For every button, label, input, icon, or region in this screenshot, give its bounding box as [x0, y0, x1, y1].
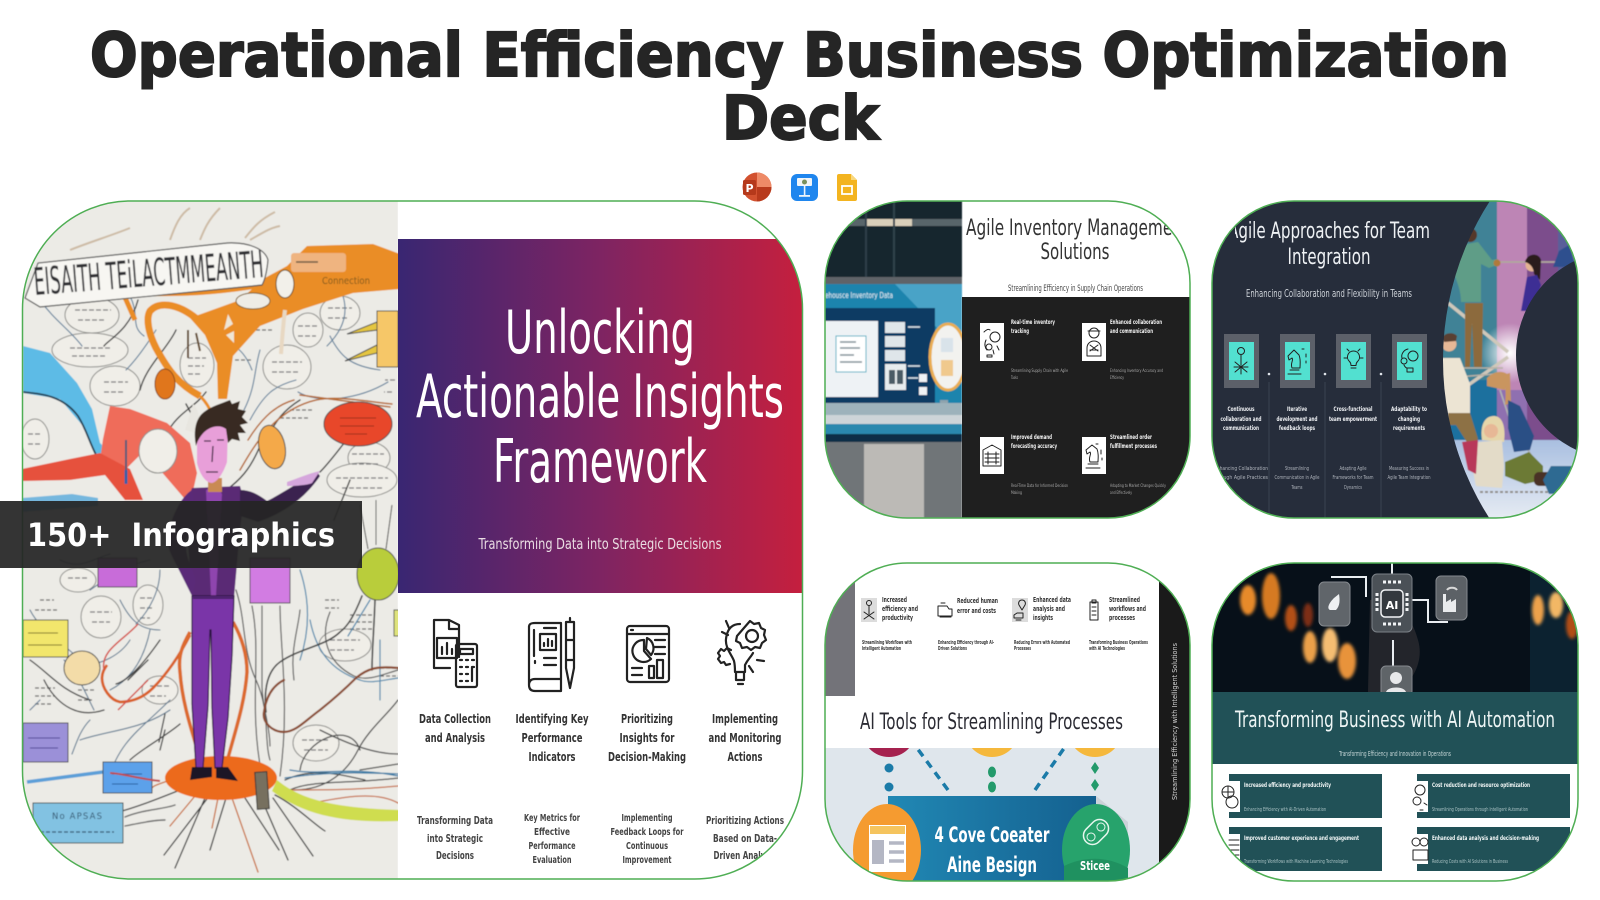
feature headings: Data Collection: [419, 711, 491, 726]
feature headings: Identifying Key: [516, 711, 588, 726]
woman in purple: [1521, 255, 1541, 311]
faint sketches: [70, 208, 280, 250]
feature: order fulfillment: Streamlined order: [1110, 434, 1152, 441]
feature descriptions: Implementing: [622, 813, 672, 824]
step: continuous collaboration: collaboration and: [1220, 416, 1262, 423]
red branch: [100, 406, 197, 505]
illustration: mind map with standing figure: [21, 201, 402, 879]
step: cross-functional teams: Frameworks for Team: [1332, 475, 1374, 481]
flow graphic: [825, 703, 1159, 896]
panel: main slide preview: [21, 201, 803, 879]
AI chip: AI: [1386, 599, 1398, 612]
panel: AI Tools for Streamlining Processes: [825, 563, 1190, 896]
icon: dashboard chart: [627, 626, 669, 682]
step: iterative development: Teams: [1291, 485, 1303, 491]
icon: report and pen: [529, 618, 574, 691]
hero title panel: Transforming Data into Strategic Decisions: [478, 535, 722, 553]
hero title panel: Unlocking: [505, 298, 695, 368]
hero title panel: Framework: [493, 427, 707, 497]
icon: Google Slides: [837, 174, 857, 201]
feature headings: Implementing: [712, 711, 778, 726]
feature descriptions: Improvement: [622, 855, 672, 866]
benefit: reduced error: [938, 596, 998, 652]
feature: order fulfillment: fulfillment processes: [1110, 443, 1157, 450]
coloured notes: No APSAS: [52, 812, 102, 822]
warehouse monitor photo: [825, 201, 966, 518]
heading: [966, 218, 1172, 260]
step: iterative development: [1274, 334, 1320, 491]
benefit: efficiency: productivity: [882, 613, 913, 622]
badge: 150+ Infographics: [0, 501, 362, 568]
feature: order fulfillment: Adapting to Market Changes Quickly: [1110, 483, 1166, 489]
benefit: workflows: [1089, 595, 1148, 652]
benefit: workflows: Transforming Business Operations: [1089, 640, 1148, 646]
title: Operational Efficiency Business Optimization: [90, 20, 1509, 91]
step: cross-functional teams: Cross-functional: [1334, 406, 1372, 413]
benefit: efficiency: [861, 595, 918, 652]
card: efficiency: Increased efficiency and productivity: [1244, 782, 1331, 789]
raised arms: [1487, 372, 1507, 390]
card: efficiency: Enhancing Efficiency with AI-Driven Automation: [1244, 807, 1326, 813]
step: continuous collaboration: Continuous: [1228, 406, 1255, 413]
benefit: reduced error: Enhancing Efficiency through AI-: [938, 640, 994, 646]
red lower branches: [102, 622, 247, 758]
card: data analysis: [1412, 827, 1570, 871]
step: iterative development: Iterative: [1287, 406, 1307, 413]
hero title panel: Actionable Insights: [416, 362, 784, 432]
benefit: data analysis: insights: [1033, 613, 1053, 622]
flow graphic: Sticee: [1080, 859, 1110, 873]
feature: order fulfillment: and Effectively: [1110, 490, 1132, 496]
feature: real-time tracking: tracking: [1011, 328, 1029, 335]
thin branches: [30, 296, 398, 872]
feature descriptions: Prioritizing Actions: [706, 815, 784, 827]
flow graphic: 4 Cove Coeater: [934, 823, 1050, 847]
feature: collaboration: Enhanced collaboration: [1110, 319, 1162, 326]
panel: Agile Approaches for Team Integration: Integration: [1288, 245, 1370, 270]
step: iterative development: feedback loops: [1279, 425, 1315, 432]
feature descriptions: Based on Data-: [713, 833, 777, 845]
dark feature panel: [962, 297, 1190, 518]
benefit: reduced error: error and costs: [957, 606, 996, 615]
feature headings: Decision-Making: [608, 749, 686, 764]
AI chip photo: [1212, 563, 1578, 696]
hero title panel: [398, 239, 803, 593]
feature: real-time tracking: Tasks: [1010, 375, 1018, 381]
step: cross-functional teams: Dynamics: [1344, 485, 1362, 491]
step: continuous collaboration: through Agile Practices: [1214, 475, 1268, 481]
step: cross-functional teams: team empowerment: [1329, 416, 1377, 423]
feature: collaboration: Enhancing Inventory Accuracy and: [1110, 368, 1163, 374]
feature: collaboration: Efficiency: [1110, 375, 1124, 381]
blonde woman: [1462, 416, 1505, 488]
card: customer experience: [1229, 827, 1382, 871]
feature: demand forecasting: [980, 434, 1068, 496]
step: iterative development: Communication in Agile: [1274, 475, 1320, 481]
orange branches: [110, 244, 400, 418]
figure: [168, 400, 320, 781]
person in blue: [1505, 400, 1573, 494]
feature descriptions: Continuous: [626, 841, 668, 852]
feature headings: Insights for: [620, 730, 675, 745]
card: customer experience: Transforming Workflows with Machine Learning Technologies: [1243, 859, 1348, 865]
feature descriptions: Driven Analysis: [714, 850, 776, 862]
benefit: reduced error: Driven Solutions: [938, 646, 967, 652]
feature: demand forecasting: forecasting accuracy: [1011, 443, 1057, 450]
figure base: [165, 756, 277, 800]
card: efficiency: [1222, 774, 1382, 818]
step: cross-functional teams: Adapting Agile: [1340, 466, 1366, 472]
benefit: data analysis: Processes: [1014, 646, 1031, 652]
person in green shirt: [1452, 228, 1500, 367]
step: continuous collaboration: [1214, 334, 1268, 481]
feature headings: Indicators: [528, 749, 576, 764]
benefit: efficiency: Increased: [882, 595, 907, 604]
illustration: mind map with standing figure: EISAITH TEiLACTMMEANTH: [32, 243, 265, 304]
benefit: data analysis: [1012, 595, 1071, 652]
icon: data and calculator: [434, 620, 477, 687]
card: customer experience: Improved customer experience and engagement: [1244, 835, 1359, 842]
step: adaptability: requirements: [1393, 425, 1425, 432]
subtitle: Transforming Efficiency and Innovation in Operations: [1338, 750, 1451, 758]
feature: real-time tracking: [980, 319, 1068, 381]
flow graphic: Aine Besign: [947, 853, 1037, 877]
side strip: [1159, 563, 1190, 881]
panel: Transforming Business with AI Automation: [1212, 563, 1578, 881]
benefit: efficiency: Intelligent Automation: [862, 646, 901, 652]
feature descriptions: Decisions: [436, 850, 474, 862]
feature: collaboration: and communication: [1110, 328, 1153, 335]
card: cost reduction: Cost reduction and resource optimization: [1432, 782, 1530, 789]
feature descriptions: Transforming Data: [417, 815, 493, 827]
feature descriptions: Effective: [534, 827, 570, 838]
card: cost reduction: Streamlining Operations through Intelligent Automation: [1432, 807, 1528, 813]
benefit: reduced error: Reduced human: [957, 596, 998, 605]
card: data analysis: Enhanced data analysis and decision-making: [1432, 835, 1539, 842]
feature descriptions: Evaluation: [532, 855, 572, 866]
feature headings: and Monitoring: [708, 730, 782, 745]
benefit: workflows: with AI Technologies: [1089, 646, 1125, 652]
person top right: [1553, 245, 1575, 267]
feature headings: Performance: [522, 730, 582, 745]
step: cross-functional teams: [1329, 334, 1377, 491]
subtitle: Enhancing Collaboration and Flexibility in Teams: [1246, 288, 1412, 300]
feature headings: Actions: [728, 749, 762, 764]
feature: order fulfillment: [1082, 434, 1166, 496]
benefit: efficiency: efficiency and: [882, 604, 918, 613]
badge: 150+ Infographics: 150+ Infographics: [27, 516, 335, 554]
separators: [1268, 373, 1382, 518]
panel: Agile Approaches for Team Integration: [1212, 201, 1600, 518]
feature: demand forecasting: Making: [1011, 490, 1022, 496]
step: iterative development: Streamlining: [1285, 466, 1309, 472]
feature: real-time tracking: Streamlining Supply Chain with Agile: [1011, 368, 1068, 374]
heading: AI Tools for Streamlining Processes: [860, 710, 1123, 735]
blue branch: [23, 346, 102, 454]
benefit: data analysis: Reducing Errors with Automated: [1014, 640, 1070, 646]
step: continuous collaboration: communication: [1223, 425, 1259, 432]
step: continuous collaboration: Enhancing Collaboration: [1214, 466, 1268, 472]
card: cost reduction: [1413, 774, 1570, 818]
headline banner on the map: [25, 243, 268, 307]
step: adaptability: changing: [1398, 416, 1420, 423]
step: iterative development: development and: [1276, 416, 1318, 423]
feature headings: and Analysis: [425, 730, 485, 745]
AI chip: [1372, 574, 1412, 632]
benefit: efficiency: Streamlining Workflows with: [862, 640, 912, 646]
title: [90, 20, 1509, 154]
feature: collaboration: [1082, 319, 1163, 381]
side strip: Streamlining Efficiency with Intelligent Solutions: [1171, 643, 1179, 800]
feature: demand forecasting: Real-Time Data for Informed Decision: [1011, 483, 1068, 489]
feature: demand forecasting: Improved demand: [1011, 434, 1052, 441]
heading: Agile Approaches for Team: [1228, 219, 1430, 244]
step: adaptability: Agile Team Integration: [1388, 475, 1430, 481]
panel: Agile Inventory Management Solutions: [825, 201, 1190, 518]
team rope illustration: [1440, 201, 1582, 518]
teal title band: [1212, 692, 1578, 764]
benefit: workflows: Streamlined: [1109, 595, 1140, 604]
heading: Agile Inventory Management: [966, 216, 1188, 241]
man on the left: [1442, 333, 1478, 447]
step: adaptability: Adaptability to: [1391, 406, 1427, 413]
feature: real-time tracking: Real-time inventory: [1011, 319, 1055, 326]
benefit: data analysis: analysis and: [1033, 604, 1065, 613]
benefit: data analysis: Enhanced data: [1033, 595, 1071, 604]
step: adaptability: Measuring Success in: [1389, 466, 1429, 472]
feature headings: [419, 711, 782, 764]
step: adaptability: [1388, 334, 1430, 481]
feature descriptions: [417, 813, 784, 866]
title: Deck: [722, 83, 880, 154]
warehouse monitor photo: ehousce Inventory Data: [825, 291, 893, 300]
feature descriptions: into Strategic: [427, 833, 483, 845]
feature headings: Prioritizing: [621, 711, 673, 726]
heading: Solutions: [1040, 240, 1110, 265]
coloured notes: [23, 311, 400, 843]
icon: PowerPoint: P: [745, 182, 754, 195]
icon: Keynote: [791, 174, 818, 201]
benefit: workflows: workflows and: [1109, 604, 1146, 613]
icon: gear light bulb: [718, 621, 766, 684]
benefit: workflows: processes: [1109, 613, 1135, 622]
format icons: [742, 172, 857, 202]
feature descriptions: Performance: [528, 841, 576, 852]
illustration: mind map with standing figure: Connection: [322, 276, 370, 287]
subtitle: Streamlining Efficiency in Supply Chain Operations: [1008, 284, 1143, 294]
feature descriptions: Feedback Loops for: [610, 827, 684, 838]
bubbles: [21, 296, 402, 761]
feature descriptions: Key Metrics for: [524, 813, 580, 824]
card: data analysis: Reducing Costs with AI Solutions in Business: [1432, 859, 1508, 865]
